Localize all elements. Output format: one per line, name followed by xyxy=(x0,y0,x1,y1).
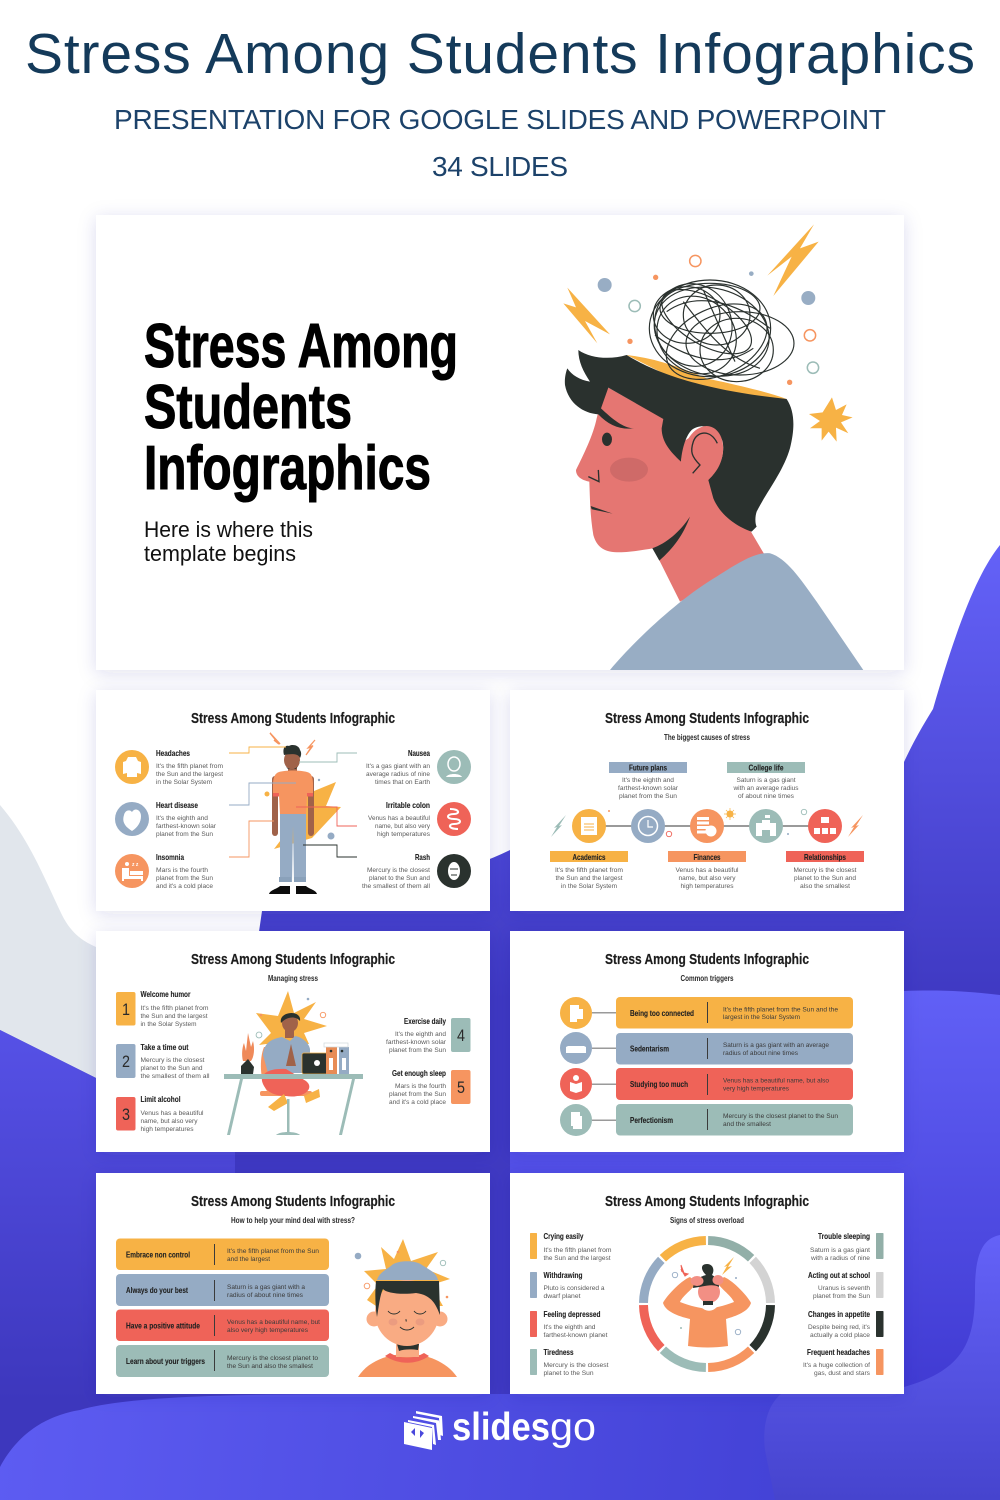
subheading: Signs of stress overload xyxy=(670,1216,744,1225)
cover title: Students xyxy=(144,373,352,442)
logo: slidesgo xyxy=(404,1406,596,1450)
row: learn about your triggers: Mercury is the closest planet to xyxy=(227,1355,318,1362)
row: learn about your triggers xyxy=(116,1345,329,1377)
subheading: Managing stress xyxy=(268,974,318,983)
subheading: The biggest causes of stress xyxy=(664,733,750,742)
row: studying too much: Venus has a beautiful name, but also xyxy=(723,1078,829,1084)
item: heart disease xyxy=(115,801,217,838)
item: irritable colon: name, but also very xyxy=(375,823,431,830)
heading: Stress Among Students Infographic xyxy=(191,710,395,727)
row: studying too much: Studying too much xyxy=(630,1080,688,1089)
cause: relationships: Mercury is the closest xyxy=(794,867,857,874)
row: embrace non control: Embrace non control xyxy=(126,1250,190,1260)
sign: crying easily xyxy=(530,1232,612,1262)
step 2: Take a time out xyxy=(140,1043,189,1052)
cause: college life: College life xyxy=(748,764,784,772)
sign: feeling depressed: Feeling depressed xyxy=(544,1310,600,1319)
illustration: standing student xyxy=(264,733,341,894)
sign: crying easily: the Sun and the largest xyxy=(544,1255,611,1262)
heading: Stress Among Students Infographic xyxy=(191,951,395,968)
step 2: Mercury is the closest xyxy=(140,1057,205,1064)
sign: frequent headaches xyxy=(803,1348,884,1377)
sign: frequent headaches: It's a huge collection of xyxy=(803,1362,870,1369)
item: nausea: Nausea xyxy=(408,749,430,758)
row: always do your best xyxy=(116,1274,329,1306)
cover title: Infographics xyxy=(144,434,431,503)
cause: academics: the Sun and the largest xyxy=(556,875,623,882)
cause: academics: It's the fifth planet from xyxy=(555,867,624,874)
step 5: and it's a cold place xyxy=(389,1099,446,1106)
item: rash xyxy=(362,853,471,890)
background: grey wave xyxy=(0,805,300,1200)
item: nausea: average radius of nine xyxy=(366,771,430,778)
row: learn about your triggers: Learn about your triggers xyxy=(126,1357,205,1366)
decorations xyxy=(551,808,863,837)
cause: academics: in the Solar System xyxy=(561,883,617,890)
item: nausea xyxy=(366,749,471,786)
cause: future plans: farthest-known solar xyxy=(618,785,679,792)
cause: future plans: It's the eighth and xyxy=(622,777,674,784)
illustration: stressed student xyxy=(563,224,863,670)
subheading: How to help your mind deal with stress? xyxy=(231,1216,355,1225)
row: perfectionism: Perfectionism xyxy=(630,1116,673,1125)
panel: overload signs slide xyxy=(510,1173,904,1394)
step 4: farthest-known solar xyxy=(386,1039,447,1046)
sign: trouble sleeping: Saturn is a gas giant xyxy=(810,1247,870,1254)
item: headaches xyxy=(115,749,224,786)
step 4: 4 xyxy=(457,1026,465,1045)
row: embrace non control: It's the fifth planet from the Sun xyxy=(227,1248,319,1255)
cause: relationships: Relationships xyxy=(804,853,846,862)
spark star xyxy=(809,397,853,442)
logo: slidesgo: go xyxy=(550,1406,596,1449)
step 1: It's the fifth planet from xyxy=(140,1005,209,1012)
sign: tiredness: Mercury is the closest xyxy=(544,1362,609,1369)
slide count: 34 SLIDES xyxy=(432,151,568,182)
row: sedentarism: Sedentarism xyxy=(630,1044,669,1054)
timeline line xyxy=(589,825,825,827)
sign: tiredness: planet to the Sun xyxy=(544,1370,594,1377)
item: irritable colon: Irritable colon xyxy=(386,801,430,810)
panel: causes slide xyxy=(510,690,904,911)
row: perfectionism: and the smallest xyxy=(723,1121,771,1128)
sign: withdrawing: Withdrawing xyxy=(544,1271,582,1280)
sign: changes in appetite xyxy=(808,1310,884,1339)
row: have a positive attitude xyxy=(116,1310,329,1341)
sign: crying easily: It's the fifth planet from xyxy=(544,1247,612,1254)
background: bottom right wave xyxy=(764,1235,1000,1500)
cause: finances: high temperatures xyxy=(680,883,734,890)
sign: crying easily: Crying easily xyxy=(544,1232,584,1241)
row: embrace non control xyxy=(116,1238,329,1270)
panel: cover slide xyxy=(96,215,904,670)
item: nausea: It's a gas giant with an xyxy=(366,763,430,770)
sign: trouble sleeping xyxy=(810,1232,884,1262)
step 4 xyxy=(386,1017,470,1054)
cover title: Stress Among xyxy=(144,312,458,381)
callout lines xyxy=(229,747,357,857)
panel: managing stress slide xyxy=(96,931,490,1152)
step 4: planet from the Sun xyxy=(389,1047,446,1054)
cover subtitle xyxy=(144,517,313,566)
cause: college life: of about nine times xyxy=(738,793,795,800)
cause: college life: with an average radius xyxy=(733,785,799,792)
row: always do your best: Saturn is a gas giant with a xyxy=(227,1284,305,1291)
item: irritable colon: Venus has a beautiful xyxy=(368,815,431,822)
row: sedentarism: Saturn is a gas giant with an average xyxy=(723,1042,829,1049)
sign: changes in appetite: Changes in appetite xyxy=(808,1310,870,1319)
sign: acting out at school: Acting out at school xyxy=(808,1271,870,1280)
scribble xyxy=(641,273,794,394)
sign: changes in appetite: Despite being red, it's xyxy=(808,1324,871,1331)
cause: finances: name, but also very xyxy=(678,875,736,882)
item: rash: the smallest of them all xyxy=(362,883,431,890)
item: insomnia: and it's a cold place xyxy=(156,883,213,890)
item: irritable colon xyxy=(368,801,471,838)
heading: Stress Among Students Infographic xyxy=(605,951,809,968)
subheading: Common triggers xyxy=(680,974,734,983)
sign: feeling depressed: It's the eighth and xyxy=(544,1324,596,1331)
item: rash: planet to the Sun and xyxy=(369,875,430,882)
step 2: 2 xyxy=(122,1052,130,1071)
floating dots xyxy=(598,255,819,385)
cause: relationships: planet to the Sun and xyxy=(794,875,856,882)
heading: Stress Among Students Infographic xyxy=(605,710,809,727)
row: always do your best: Always do your best xyxy=(126,1286,188,1295)
row: perfectionism: Mercury is the closest planet to the Sun xyxy=(723,1113,838,1120)
title: Stress Among Students Infographics xyxy=(25,22,975,86)
icon: slides stack xyxy=(404,1411,443,1450)
row: learn about your triggers: the Sun and also the smallest xyxy=(227,1363,313,1370)
item: insomnia: Mars is the fourth xyxy=(156,867,208,874)
step 3: Venus has a beautiful xyxy=(140,1110,204,1117)
step 2: planet to the Sun and xyxy=(140,1065,203,1072)
item: heart disease: It's the eighth and xyxy=(156,815,208,822)
sign: withdrawing: Pluto is considered a xyxy=(544,1285,605,1292)
item: rash: Rash xyxy=(415,853,430,862)
sign: feeling depressed xyxy=(530,1310,608,1339)
cause: finances: Finances xyxy=(694,853,721,862)
step 2 xyxy=(116,1043,210,1080)
heading: Stress Among Students Infographic xyxy=(605,1193,809,1210)
illustration: meditating student at desk xyxy=(224,991,363,1135)
row: studying too much: very high temperatures xyxy=(723,1086,790,1092)
sign: tiredness: Tiredness xyxy=(544,1348,574,1357)
step 4: It's the eighth and xyxy=(395,1031,446,1038)
sign: withdrawing xyxy=(530,1271,605,1300)
step 5 xyxy=(389,1069,470,1106)
item: insomnia: planet from the Sun xyxy=(156,875,213,882)
item: headaches: the Sun and the largest xyxy=(156,771,223,778)
row: have a positive attitude: also very high temperatures xyxy=(227,1327,309,1334)
item: headaches: It's the fifth planet from xyxy=(156,763,224,770)
cover title xyxy=(144,312,458,503)
illustration: calm boy with brain xyxy=(355,1239,457,1377)
step 5: planet from the Sun xyxy=(389,1091,446,1098)
row: being too connected: largest in the Solar System xyxy=(723,1014,800,1021)
row: being too connected xyxy=(560,997,853,1029)
cause: relationships: also the smallest xyxy=(800,883,850,890)
sign: frequent headaches: Frequent headaches xyxy=(807,1348,870,1357)
cause: future plans xyxy=(609,762,687,843)
sign: trouble sleeping: Trouble sleeping xyxy=(818,1232,870,1241)
row: embrace non control: and the largest xyxy=(227,1256,270,1263)
step 1: the Sun and the largest xyxy=(140,1013,208,1020)
item: irritable colon: high temperatures xyxy=(377,831,431,838)
lightning bolts xyxy=(767,224,819,296)
step 1: in the Solar System xyxy=(140,1021,197,1028)
sign: acting out at school xyxy=(808,1271,884,1300)
item: headaches: Headaches xyxy=(156,749,190,758)
background: purple lower left xyxy=(0,1030,235,1500)
panel: triggers slide xyxy=(510,931,904,1152)
step 1 xyxy=(116,990,209,1028)
sign: tiredness xyxy=(530,1348,609,1377)
cause: finances: Venus has a beautiful xyxy=(676,867,739,874)
background: purple right fold xyxy=(510,990,1000,1500)
step 5: Mars is the fourth xyxy=(395,1083,446,1090)
item: heart disease: planet from the Sun xyxy=(156,831,213,838)
step 3: Limit alcohol xyxy=(140,1095,180,1104)
illustration: student holding head xyxy=(663,1257,751,1348)
cause: college life: Saturn is a gas giant xyxy=(736,777,796,784)
logo: slidesgo: slides xyxy=(452,1406,550,1449)
step 3 xyxy=(116,1095,204,1133)
subtitle: PRESENTATION FOR GOOGLE SLIDES AND POWERPOINT xyxy=(114,104,886,135)
panel: symptoms slide xyxy=(96,690,490,911)
cause: college life xyxy=(727,762,805,843)
item: headaches: in the Solar System xyxy=(156,779,212,786)
row: have a positive attitude: Have a positive attitude xyxy=(126,1322,200,1330)
item: rash: Mercury is the closest xyxy=(367,867,430,874)
item: insomnia: z z xyxy=(132,862,139,868)
sign: feeling depressed: farthest-known planet xyxy=(544,1332,608,1339)
row: being too connected: It's the fifth planet from the Sun and the xyxy=(723,1006,838,1014)
step 2: the smallest of them all xyxy=(140,1073,210,1080)
step 1: 1 xyxy=(122,1000,130,1019)
step 3: name, but also very xyxy=(140,1118,198,1125)
row: being too connected: Being too connected xyxy=(630,1009,694,1018)
step 3: 3 xyxy=(122,1105,130,1124)
step 5: 5 xyxy=(457,1078,465,1097)
item: insomnia xyxy=(115,853,213,890)
cause: academics xyxy=(550,809,628,890)
row: sedentarism xyxy=(560,1032,853,1064)
sign: changes in appetite: actually a cold place xyxy=(810,1332,870,1339)
background: purple wave xyxy=(0,545,1000,1500)
step 5: Get enough sleep xyxy=(392,1069,446,1078)
row: have a positive attitude: Venus has a beautiful name, but xyxy=(227,1319,320,1326)
cause: finances xyxy=(668,809,746,890)
item: nausea: times that on Earth xyxy=(375,779,430,786)
cause: academics: Academics xyxy=(572,853,606,862)
background: bottom left wave xyxy=(0,1394,781,1500)
item: heart disease: farthest-known solar xyxy=(156,823,217,830)
sign: frequent headaches: gas, dust and stars xyxy=(814,1370,871,1377)
row: studying too much xyxy=(560,1068,853,1100)
step 1: Welcome humor xyxy=(140,990,191,999)
step 4: Exercise daily xyxy=(404,1017,446,1026)
panel: mind help slide xyxy=(96,1173,490,1394)
cause: relationships xyxy=(786,809,864,890)
row: always do your best: radius of about nine times xyxy=(227,1292,304,1299)
cause: future plans: planet from the Sun xyxy=(619,793,677,800)
sign: trouble sleeping: with a radius of nine xyxy=(810,1255,870,1262)
cause: future plans: Future plans xyxy=(629,764,667,772)
step 3: high temperatures xyxy=(140,1126,194,1133)
row: sedentarism: radius of about nine times xyxy=(723,1050,799,1057)
cover subtitle: Here is where this xyxy=(144,517,313,542)
sign: acting out at school: Uranus is seventh xyxy=(818,1285,870,1292)
item: insomnia: Insomnia xyxy=(156,853,184,862)
item: heart disease: Heart disease xyxy=(156,801,198,810)
donut ring xyxy=(644,1240,770,1368)
cover subtitle: template begins xyxy=(144,541,296,566)
sign: withdrawing: dwarf planet xyxy=(544,1293,581,1300)
row: perfectionism xyxy=(560,1104,853,1136)
sign: acting out at school: planet from the Sun xyxy=(813,1293,870,1300)
heading: Stress Among Students Infographic xyxy=(191,1193,395,1210)
